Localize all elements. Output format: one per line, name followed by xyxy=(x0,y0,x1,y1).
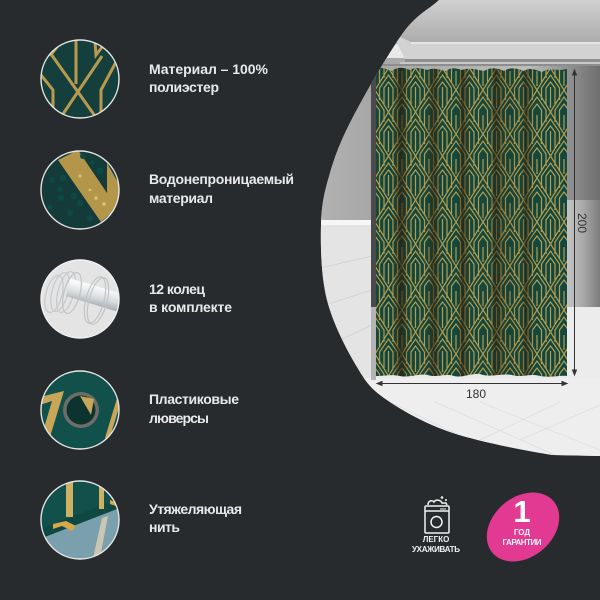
height label: 200 xyxy=(575,213,589,233)
label: easy care xyxy=(412,535,460,554)
warranty badge xyxy=(473,478,573,576)
text: rings xyxy=(149,281,232,315)
photo: material close-up xyxy=(40,39,120,119)
label: easy care: УХАЖИВАТЬ xyxy=(412,545,460,554)
text: waterproof xyxy=(149,171,294,206)
photo: rings on rod xyxy=(40,259,122,339)
icon: washing machine xyxy=(425,496,449,533)
photo: waterproof close-up xyxy=(40,150,120,230)
text: material xyxy=(149,61,269,95)
bathroom photo circle xyxy=(310,0,600,460)
upper wall xyxy=(310,58,600,220)
text: waterproof: материал xyxy=(149,190,213,206)
text: thread xyxy=(149,501,242,535)
floor tile lines xyxy=(390,402,600,455)
right wall tiles xyxy=(567,200,600,308)
height arrow xyxy=(572,70,576,375)
floor xyxy=(364,378,600,456)
warranty badge: 1 xyxy=(513,494,531,529)
photo: grommet xyxy=(40,370,122,450)
curtain shadow xyxy=(371,68,376,380)
text: grommets xyxy=(149,391,239,426)
warranty badge: ГОД xyxy=(514,528,530,537)
text: material: полиэстер xyxy=(149,79,219,95)
text: material: Материал – 100% xyxy=(149,61,269,77)
text: thread: Утяжеляющая xyxy=(149,501,242,517)
left white wainscot xyxy=(320,220,371,380)
warranty badge: ГАРАНТИИ xyxy=(502,538,542,547)
photo: weighted thread xyxy=(40,480,120,562)
cornice xyxy=(396,37,600,64)
curtain rod xyxy=(378,64,600,66)
width label: 180 xyxy=(466,387,486,401)
text: grommets: Пластиковые xyxy=(149,391,239,407)
label: easy care: ЛЕГКО xyxy=(423,535,449,544)
bathtub xyxy=(567,307,600,308)
text: rings: в комплекте xyxy=(149,299,232,315)
text: thread: нить xyxy=(149,519,180,535)
width arrow xyxy=(377,382,567,386)
text: waterproof: Водонепроницаемый xyxy=(149,171,294,187)
curtain xyxy=(376,68,567,377)
ceiling xyxy=(396,0,600,44)
text: rings: 12 колец xyxy=(149,281,205,297)
text: grommets: люверсы xyxy=(149,410,209,426)
